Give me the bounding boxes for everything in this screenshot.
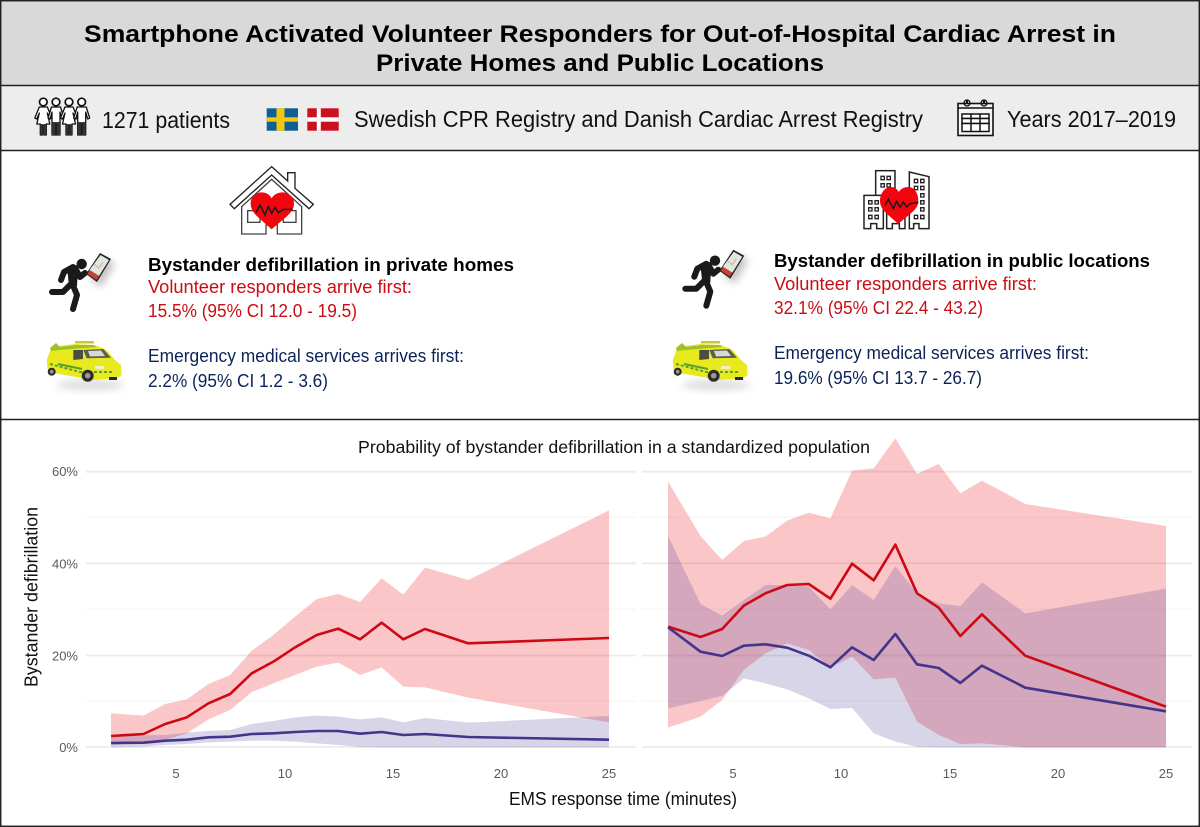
icon: patients [35, 98, 90, 135]
x axis labels: 10 [278, 766, 292, 781]
EMS result: public locations: Emergency medical services arrives first: [774, 342, 1089, 363]
icon: calendar [958, 100, 993, 136]
x axis labels: 15 [386, 766, 400, 781]
title text: Private Homes and Public Locations [376, 50, 824, 77]
volunteer result: private homes: 15.5% (95% CI 12.0 - 19.5) [148, 300, 357, 321]
x axis labels [729, 766, 1173, 781]
confidence band: volunteer responders [668, 438, 1166, 747]
EMS result: public locations [774, 342, 1089, 388]
x axis labels: 5 [729, 766, 737, 781]
title banner [1, 1, 1199, 85]
icon: volunteer runner with smartphone [685, 250, 748, 306]
title text: Smartphone Activated Volunteer Responders for Out-of-Hospital Cardiac Arrest in [84, 21, 1116, 48]
heading: public locations: Bystander defibrillation in public locations [774, 250, 1150, 271]
y axis title: Bystander defibrillation [22, 507, 42, 687]
y axis labels: 60% [52, 464, 78, 479]
line: volunteer responders [111, 623, 609, 736]
y axis labels: 40% [52, 556, 78, 572]
icon: Danish flag [307, 108, 339, 131]
icon: house with heart [230, 167, 313, 234]
x axis labels: 15 [943, 766, 957, 781]
icon: ambulance [673, 341, 750, 390]
x axis labels: 5 [172, 766, 180, 781]
confidence band: EMS [668, 536, 1166, 747]
panel: private homes [47, 167, 514, 391]
chart: public locations [642, 438, 1192, 781]
x axis title: EMS response time (minutes) [509, 789, 737, 809]
icon: Swedish flag [267, 108, 298, 131]
x axis labels: 25 [602, 766, 616, 781]
heading: private homes: Bystander defibrillation in private homes [148, 254, 514, 275]
title text [84, 21, 1116, 77]
chart: private homes [86, 472, 636, 781]
x axis labels: 20 [494, 766, 508, 781]
confidence band: volunteer responders [111, 510, 609, 745]
volunteer result: public locations [774, 273, 1037, 318]
EMS result: private homes: 2.2% (95% CI 1.2 - 3.6) [148, 370, 328, 391]
x axis labels: 10 [834, 766, 848, 781]
y axis labels: 20% [52, 648, 78, 664]
study years: Years 2017–2019 [1007, 106, 1176, 132]
icon: buildings with heart [864, 171, 929, 229]
registry sources: Swedish CPR Registry and Danish Cardiac Arrest Registry [354, 106, 923, 132]
y axis labels: 0% [59, 740, 78, 755]
line: volunteer responders [668, 545, 1166, 707]
patient count: 1271 patients [102, 107, 230, 133]
volunteer result: private homes: Volunteer responders arrive first: [148, 276, 412, 297]
chart title: Probability of bystander defibrillation in a standardized population [358, 437, 870, 457]
icon: volunteer runner with smartphone [52, 253, 115, 309]
y axis labels [52, 464, 78, 755]
x axis labels: 20 [1051, 766, 1065, 781]
study information bar [1, 86, 1199, 150]
confidence band: EMS [111, 716, 609, 747]
x axis labels: 25 [1159, 766, 1173, 781]
volunteer result: private homes [148, 276, 412, 321]
line: EMS [668, 627, 1166, 711]
volunteer result: public locations: 32.1% (95% CI 22.4 - 43.2) [774, 297, 983, 318]
icon: ambulance [47, 341, 124, 390]
line: EMS [111, 731, 609, 743]
panel: probability charts [22, 437, 1192, 809]
EMS result: public locations: 19.6% (95% CI 13.7 - 26.7) [774, 367, 982, 388]
EMS result: private homes: Emergency medical services arrives first: [148, 345, 464, 366]
x axis labels [172, 766, 616, 781]
volunteer result: public locations: Volunteer responders arrive first: [774, 273, 1037, 294]
EMS result: private homes [148, 345, 464, 391]
panel: public locations [673, 171, 1150, 390]
